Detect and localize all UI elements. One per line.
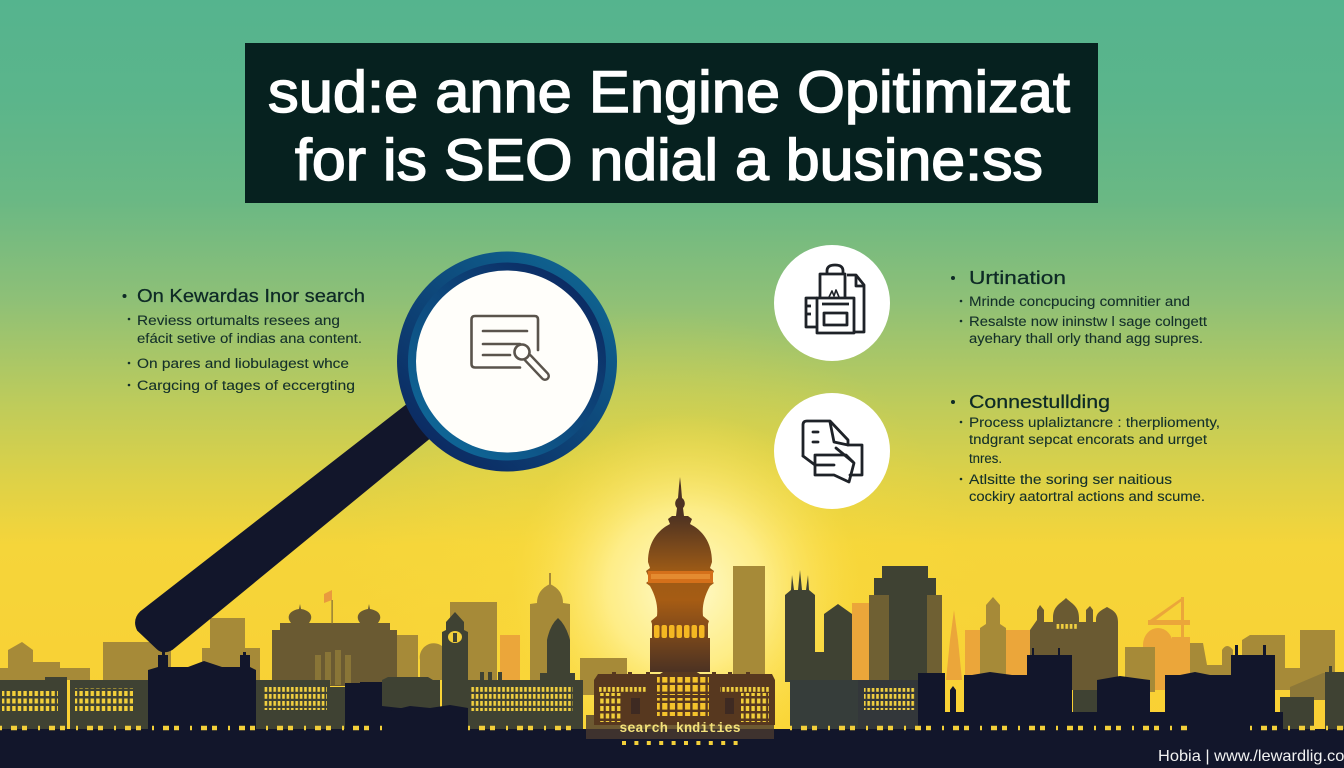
- left bullet list: [128, 313, 362, 393]
- right text block: Connestullding: [951, 392, 1220, 504]
- magnifying glass: [136, 252, 617, 651]
- skyline: dark towers: [0, 566, 1344, 750]
- icon: document search: [472, 316, 545, 376]
- landmark wings: [586, 668, 775, 739]
- right text block: Connestullding: Process uplaliztancre : therpliomenty,: [969, 415, 1220, 430]
- right text block: Connestullding: tndgrant sepcat encorats and urrget: [969, 432, 1207, 447]
- right text block: Connestullding: Connestullding: [969, 392, 1110, 412]
- magnifier ring: [397, 252, 617, 472]
- right text block: Connestullding: tnres.: [969, 451, 1002, 466]
- skyline: navy foreground buildings: [148, 645, 1283, 730]
- left text block: [122, 286, 365, 393]
- right text block: Connestullding: cockiry aatortral actions and scume.: [969, 489, 1205, 504]
- right domed palace: [1030, 598, 1118, 690]
- right text block: Urtination: Urtination: [969, 268, 1066, 288]
- skyline: mid-tone palace and domes: [272, 590, 1118, 690]
- ground strip: [0, 729, 1344, 768]
- right text block: Connestullding: Atlsitte the soring ser naitious: [969, 472, 1172, 487]
- street lights: [0, 726, 1344, 730]
- navy halls right: [964, 645, 1283, 730]
- clock tower: [442, 612, 468, 750]
- right text block: Urtination: [951, 268, 1207, 346]
- landmark tower windows: [654, 625, 704, 638]
- title line 1: sud:e anne Engine Opitimizat: [268, 60, 1070, 125]
- central domed landmark: [586, 477, 775, 743]
- skyline: far background buildings: [0, 566, 1344, 700]
- left bullet list: Cargcing of tages of eccergting: [137, 378, 355, 393]
- right text block: Urtination: Resalste now ininstw l sage colngett: [969, 314, 1207, 329]
- title line 2: for is SEO ndial a busine:ss: [295, 128, 1043, 193]
- tall central tower: [869, 566, 942, 685]
- magnifier handle: [136, 391, 445, 651]
- left bullet list: Reviess ortumalts resees ang: [137, 313, 340, 328]
- left bullet list: On pares and liobulagest whce: [137, 356, 349, 371]
- palace with two domes: [272, 604, 397, 686]
- icon circle: stacked documents: [774, 393, 890, 509]
- landmark dome: [646, 477, 714, 672]
- right text block: Urtination: Mrinde concpucing comnitier and: [969, 294, 1190, 309]
- navy hall left: [148, 652, 256, 730]
- building windows: [2, 687, 915, 712]
- right text block: Urtination: ayehary thall orly thand agg supres.: [969, 331, 1203, 346]
- left heading: On Kewardas Inor search: [137, 286, 365, 306]
- icon circle: shopping bag and document: [774, 245, 890, 361]
- flag on palace: [324, 590, 333, 624]
- landmark caption: search kndities: [619, 722, 741, 737]
- gothic tower: [785, 570, 852, 682]
- left bullet list: efácit setive of indias ana content.: [137, 331, 362, 346]
- title banner: [245, 43, 1098, 203]
